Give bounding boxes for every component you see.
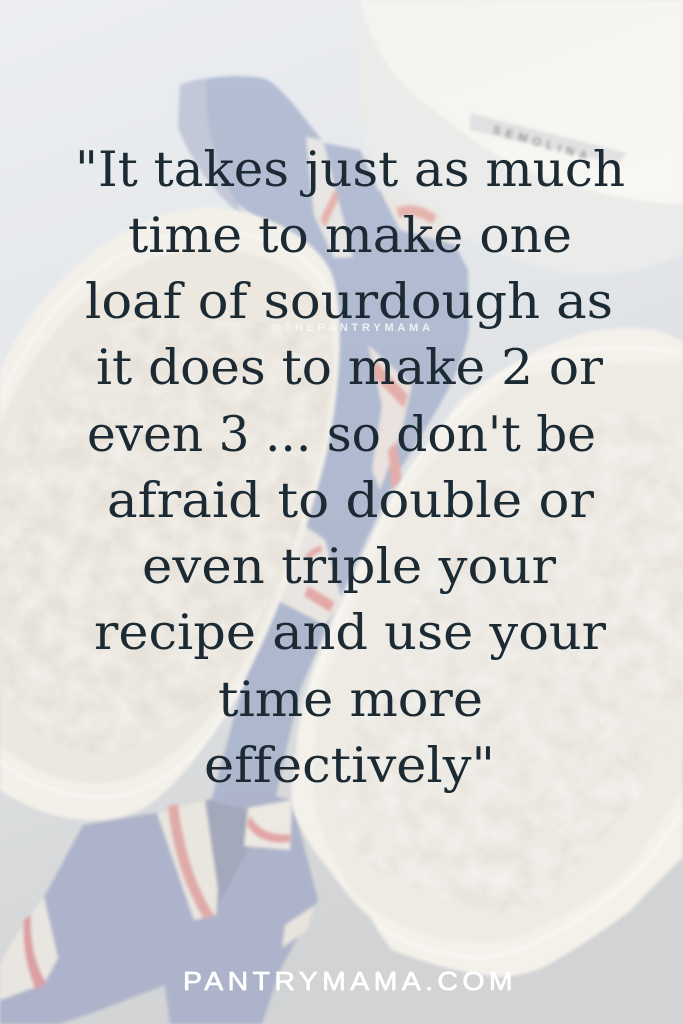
right basket rim ridge [312, 348, 683, 690]
quote line 10: effectively" [204, 737, 495, 794]
website footer: PANTRYMAMA.COM [183, 966, 517, 996]
right basket inner wall [313, 363, 683, 942]
towel red stripe centre [372, 360, 408, 408]
photo: semolina jar [352, 0, 683, 274]
quote line 9: time more [218, 671, 483, 728]
towel cream stripe centre [368, 345, 412, 490]
towel upper and middle fold [178, 76, 469, 805]
towel red stripes lower centre [304, 586, 335, 612]
photo: flour surface [360, 0, 683, 203]
quote line 4: it does to make 2 or [96, 339, 604, 396]
towel dark gap shadow [205, 800, 250, 905]
towel lower cream stripe [157, 800, 218, 920]
towel lower right stripe [282, 905, 315, 948]
towel cream stripe upper left [306, 137, 353, 258]
towel lower left body [0, 790, 318, 1024]
quote text [75, 141, 625, 794]
quote line 6: afraid to double or [107, 472, 595, 529]
towel lower red stripe [168, 804, 214, 919]
quote line 3: loaf of sourdough as [85, 273, 613, 330]
photo: left proofing basket [0, 208, 340, 820]
towel cream stripe upper right [380, 190, 456, 245]
quote line 7: even triple your [142, 538, 557, 595]
towel far left cream stripe [0, 897, 58, 1000]
left basket inner wall [0, 248, 334, 784]
towel red stripe upper right [396, 205, 437, 224]
quote line 8: recipe and use your [94, 604, 607, 661]
quote line 5: even 3 ... so don't be [87, 406, 596, 463]
towel right flap cream [244, 800, 292, 850]
photo: right proofing basket [291, 328, 683, 977]
right dough [335, 411, 683, 914]
towel pale edge band [178, 78, 245, 218]
watermark handle: @THEPANTRYMAMA [270, 322, 430, 334]
quote line 1: "It takes just as much [75, 141, 625, 198]
towel red stripe upper left [320, 189, 339, 228]
towel cream fold lower centre [277, 520, 342, 625]
towel right flap red stripe [247, 815, 290, 843]
quote line 2: time to make one [128, 207, 572, 264]
left dough [0, 321, 329, 755]
photo: semolina label: SEMOLINA [491, 122, 590, 163]
photo: blue tea towel [0, 76, 469, 1024]
photo: semolina label [470, 113, 627, 164]
left basket rim ridge [0, 230, 330, 400]
towel far left red stripe [24, 915, 46, 990]
